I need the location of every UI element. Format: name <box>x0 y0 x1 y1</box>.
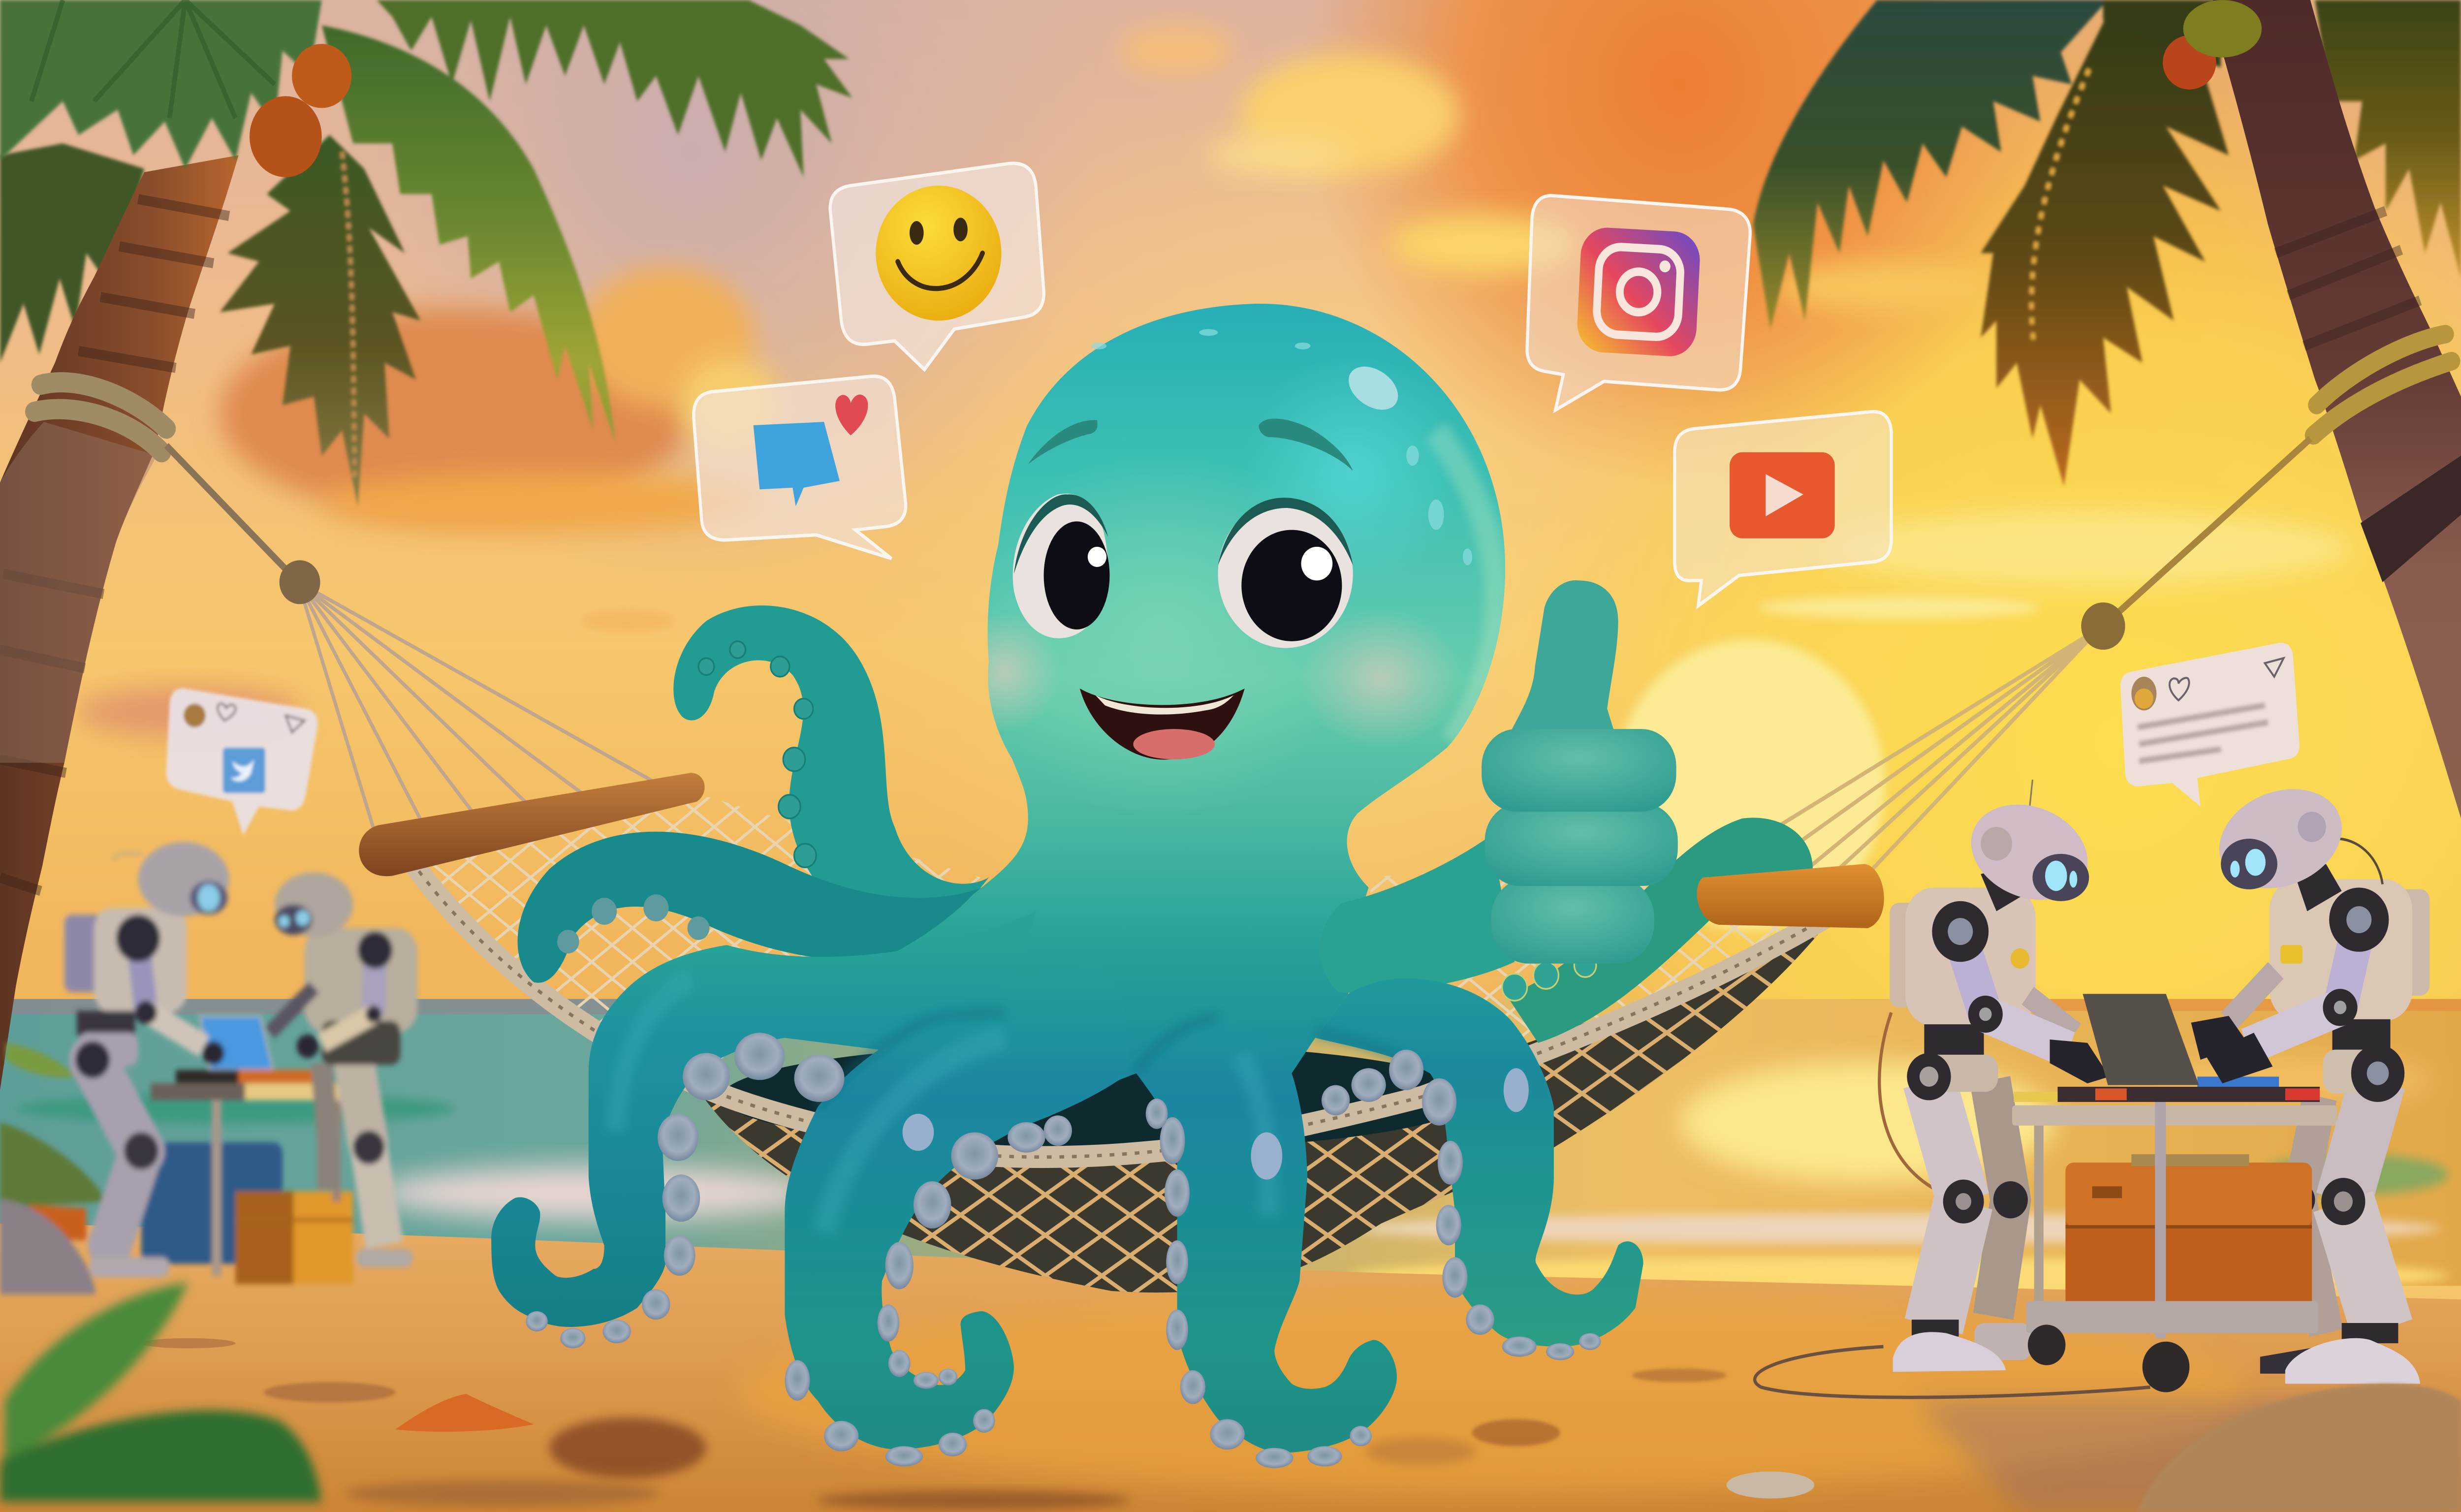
blue barrel <box>141 1142 283 1264</box>
avatar <box>2131 677 2156 710</box>
left robots at workbench <box>0 842 417 1294</box>
left palm coconuts <box>250 44 351 177</box>
setting sun <box>1615 639 1885 930</box>
tentacle highlight spots <box>903 1068 1529 1180</box>
centre tentacle <box>1136 1017 1397 1453</box>
right spreader bar <box>1697 864 1884 928</box>
hammock <box>166 439 2310 1292</box>
heart outline <box>2170 678 2189 700</box>
hammock lower basket <box>703 911 1836 1292</box>
lower finger <box>1491 878 1654 964</box>
upper netting, sky visible through mesh <box>411 796 1836 1088</box>
robot at cart, right <box>2191 773 2429 1384</box>
tentacle suckers <box>526 1033 1601 1468</box>
left palm rope wrap <box>34 382 166 452</box>
raised arm <box>1320 835 1514 993</box>
left middle tentacle <box>518 832 1020 983</box>
right palm fronds behind trunk <box>1753 0 2461 486</box>
speech bubble: small left post <box>166 689 317 835</box>
robot far left <box>64 842 229 1277</box>
head shine spot <box>1342 358 1405 418</box>
tentacle sheen <box>615 979 1269 1232</box>
starfish <box>396 1394 534 1432</box>
suckers under arm <box>1502 953 1596 1001</box>
laptop <box>176 1016 333 1083</box>
back right tentacle <box>1507 818 1813 1043</box>
lower left tentacle <box>491 911 1036 1327</box>
left palm tree <box>0 0 852 1090</box>
suckers on curled tentacle <box>698 641 816 867</box>
robot at cart, left <box>1890 780 2110 1372</box>
thumb <box>1507 580 1618 739</box>
icon: play button <box>1730 452 1835 538</box>
lower right tentacle <box>1315 978 1643 1347</box>
speech bubble: small right post <box>2120 643 2300 807</box>
top finger <box>1482 729 1676 812</box>
clouds <box>75 27 2354 737</box>
octopus <box>491 304 1884 1468</box>
speech bubble: Instagram <box>1527 196 1750 410</box>
right robots at cart <box>1755 773 2429 1397</box>
icon: smiley face <box>876 186 1001 320</box>
foreground leaves, bottom left <box>0 1283 322 1502</box>
orange crate <box>235 1192 353 1284</box>
head speckles <box>1091 329 1472 566</box>
hammock rim rope <box>411 861 1836 1157</box>
left eye <box>1013 494 1109 638</box>
right eye <box>1218 498 1353 648</box>
send triangle <box>2265 658 2284 677</box>
left palm fronds behind trunk <box>0 0 852 506</box>
smiling mouth <box>1080 689 1245 759</box>
robot second left <box>270 873 417 1267</box>
sea with sun reflection and foam <box>0 999 2461 1294</box>
icon: Instagram camera <box>1576 226 1701 358</box>
foreground rock, bottom right <box>2138 1384 2461 1512</box>
sandy beach <box>0 1224 2461 1512</box>
robot at cart, right: rear leg <box>2260 1097 2338 1374</box>
left wooden spreader bar <box>359 773 705 876</box>
right palm trunk <box>2213 0 2461 819</box>
speech bubble: smiley <box>830 163 1044 370</box>
right palm rope wrap <box>2313 334 2452 436</box>
right palm tree <box>1753 0 2461 819</box>
right palm coconuts <box>2163 0 2262 90</box>
cable from robot <box>1879 1012 1946 1195</box>
thumbs-up hand <box>1482 580 1678 964</box>
sunset sky <box>0 0 2461 1080</box>
left palm crown fronds <box>0 0 322 169</box>
hammock support ropes <box>166 439 2310 874</box>
speech bubble: video play <box>1674 411 1891 606</box>
blurred post lines <box>2138 705 2268 761</box>
centre left tentacle <box>785 962 1129 1449</box>
cart with crate and laptop <box>2012 994 2337 1392</box>
icon: blue bird tile <box>223 748 265 793</box>
dark hammock interior <box>722 1043 1475 1151</box>
icon: blue message <box>754 422 840 506</box>
body and head <box>785 304 1505 1080</box>
middle finger <box>1485 803 1678 886</box>
head shading overlays <box>987 389 1505 775</box>
plant and rock at left edge <box>0 1043 107 1294</box>
left palm trunk <box>0 155 239 1090</box>
icon: heart <box>835 395 868 436</box>
eyebrows <box>1028 418 1353 471</box>
suckers on left middle tentacle <box>557 894 709 953</box>
left palm leaflet veins <box>32 0 275 118</box>
tentacle fold shadows <box>818 1012 1420 1107</box>
upper curled tentacle <box>673 605 989 937</box>
speech bubble: message and heart <box>694 376 906 559</box>
cable on sand <box>1755 1347 2150 1397</box>
workbench <box>151 1083 356 1276</box>
